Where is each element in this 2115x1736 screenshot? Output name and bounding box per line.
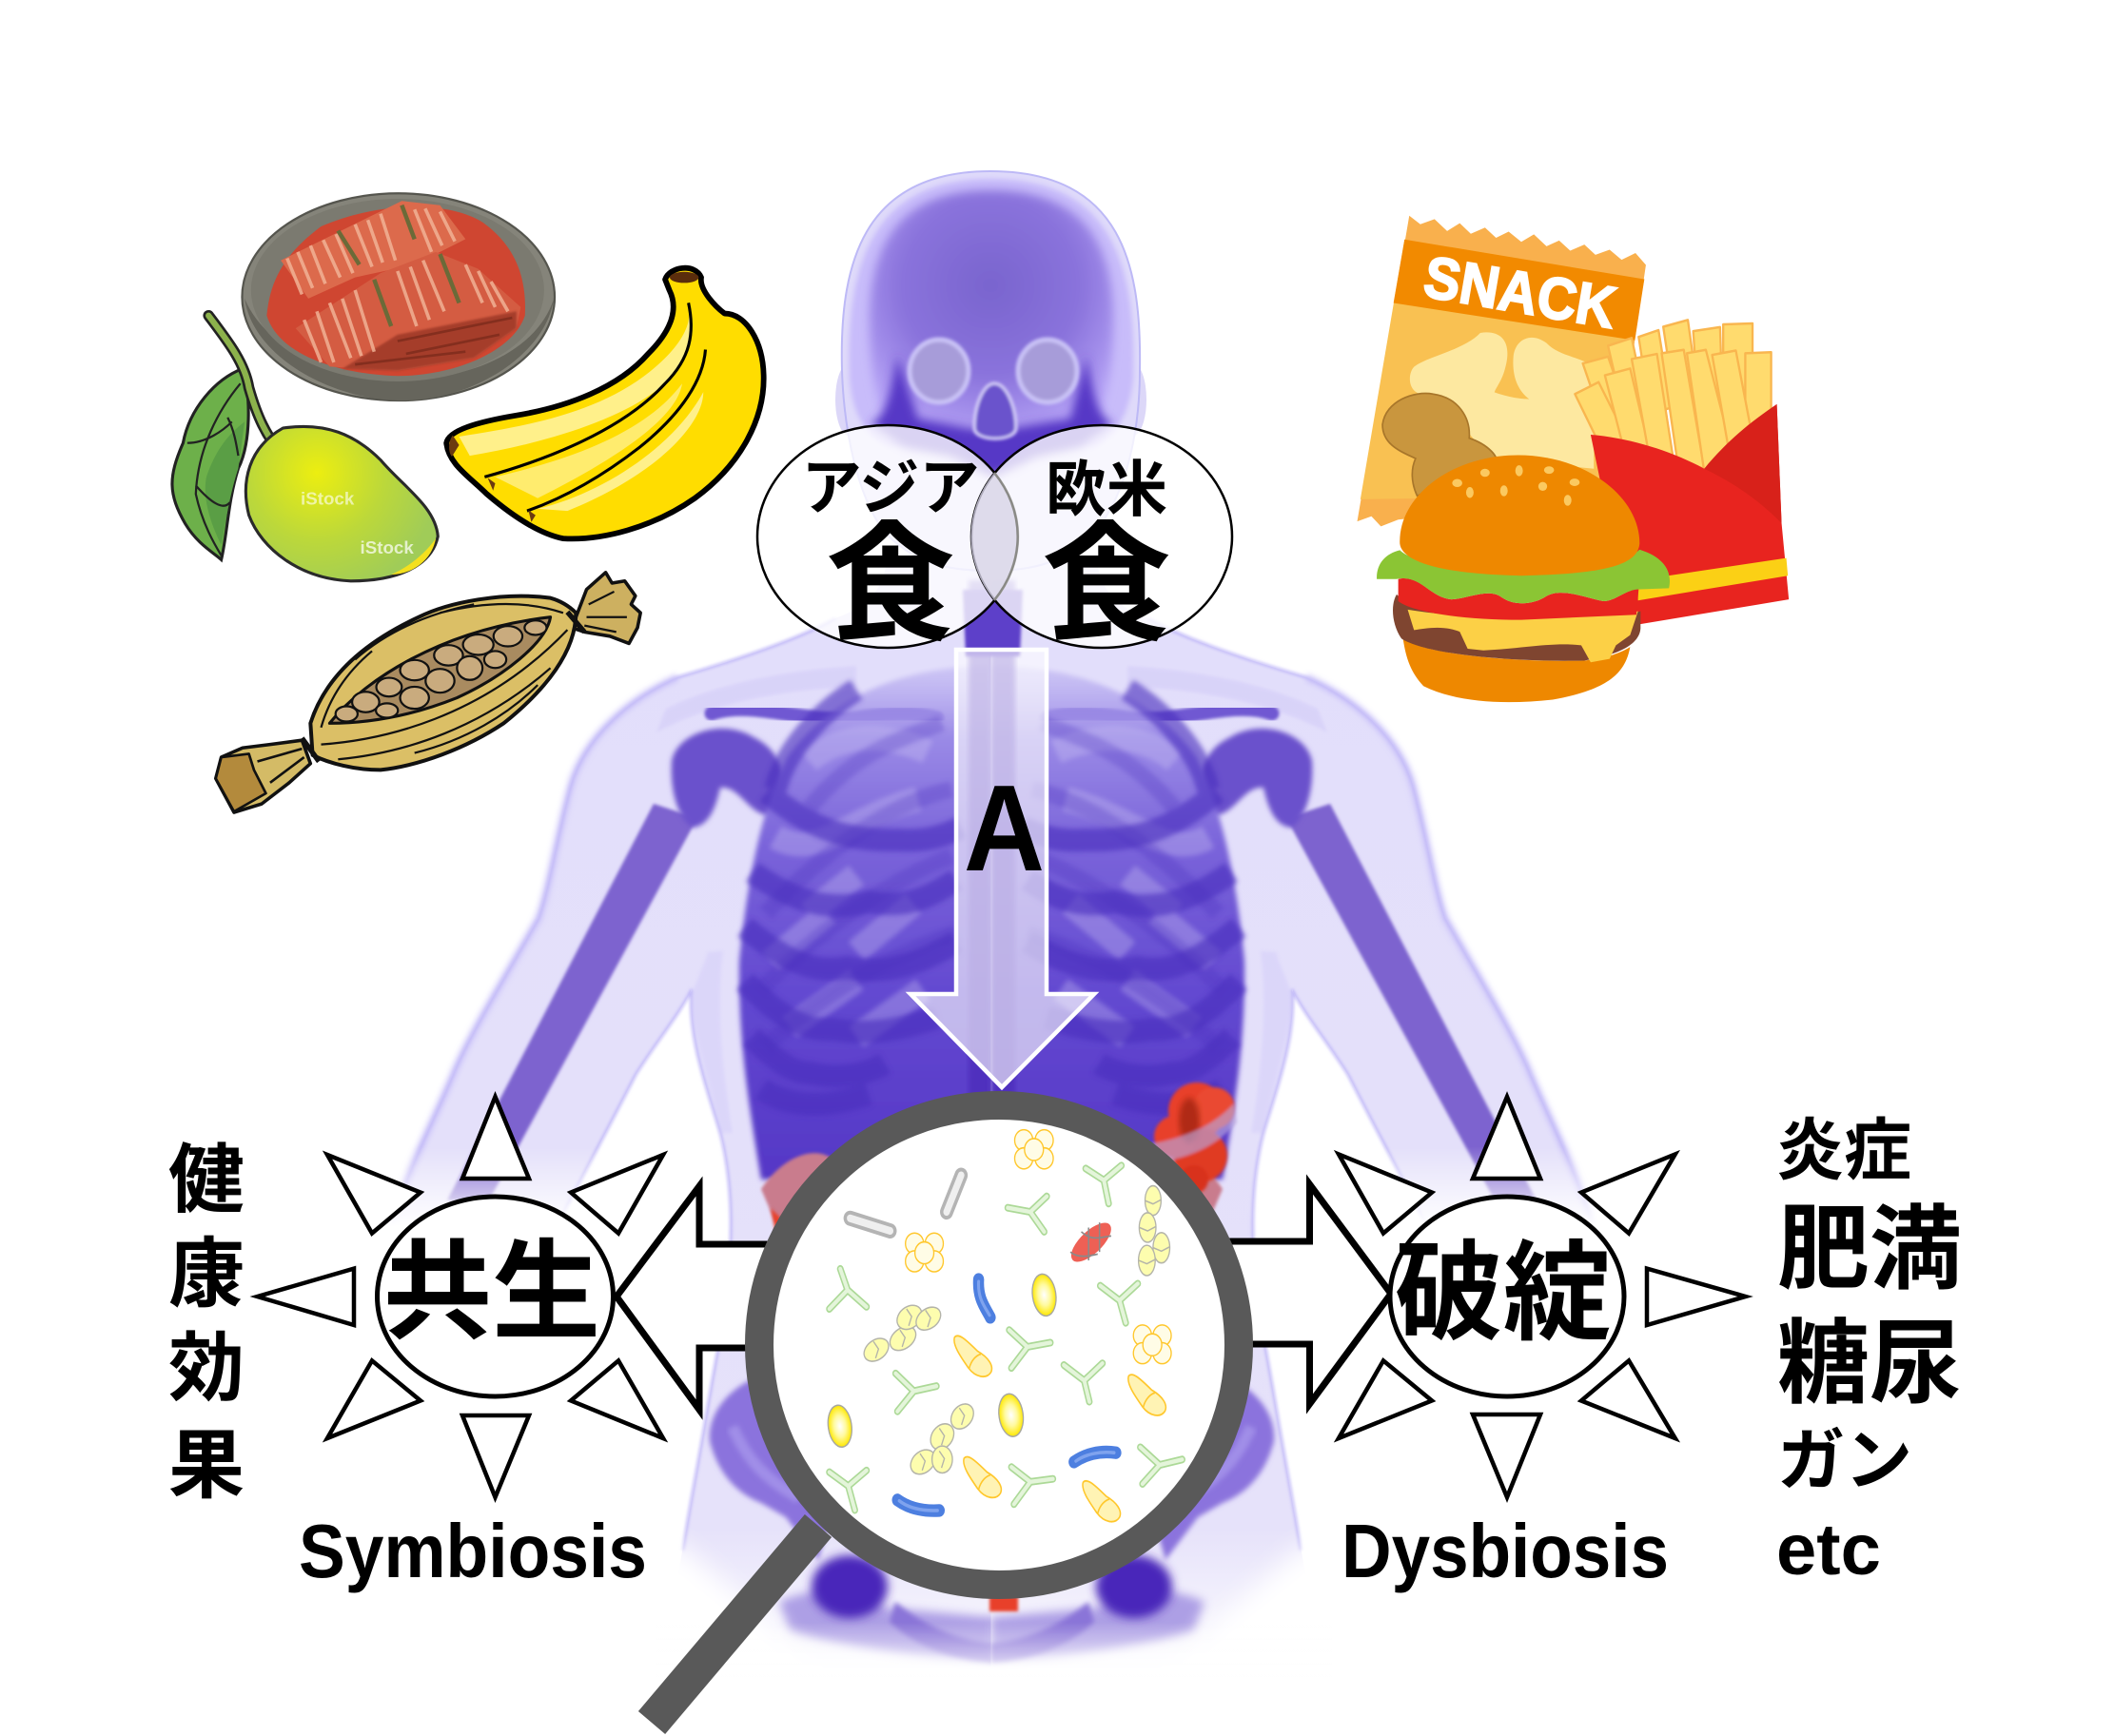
circle: Asian diet [757,425,1018,648]
Symbiosis sun [257,1097,663,1497]
head and skull [835,171,1146,656]
disease list: ガン [1777,1424,1912,1499]
food group: Western diet [1358,216,1789,702]
circle [1390,1197,1624,1396]
label 欧米: 欧米 [1046,456,1167,524]
kimchi bowl [242,193,555,400]
snack bag [1358,216,1646,526]
health benefits vertical text: 効 [168,1326,245,1411]
orange club bacteria [954,1336,1165,1522]
bacteria [825,1130,1183,1522]
rays [257,1097,663,1497]
french fries [1575,320,1772,472]
magnifying glass with gut bacteria [652,1105,1239,1723]
snack label text: SNACK [1420,244,1621,341]
circle: Western diet [970,425,1232,648]
Dysbiosis sun [1339,1097,1746,1497]
rays [1339,1097,1746,1497]
large character 食 right: 食 [1042,513,1171,657]
disease list: 糖尿 [1777,1312,1962,1415]
破綻: 破綻 [1395,1234,1612,1355]
mango: iStock [361,537,414,557]
leaf and stem [172,316,281,559]
lens [759,1105,1239,1585]
letter A: A [964,760,1045,897]
yellow oval bacteria [825,1272,1059,1450]
disease list: 肥満 [1777,1198,1962,1301]
Symbiosis label: Symbiosis [299,1509,647,1593]
banana [446,268,764,538]
yellow chain bacteria [861,1186,1170,1479]
mango [245,426,438,581]
mango: iStock [301,488,355,508]
disease list: 炎症 [1776,1114,1911,1189]
hamburger [1377,455,1670,702]
green Y-shaped bacteria [830,1165,1183,1510]
circle [377,1197,613,1396]
food group: Asian diet [172,193,764,812]
human body skeleton illustration [362,171,1639,1736]
large character 食 left: 食 [826,513,955,657]
disease list: etc [1776,1510,1881,1590]
red organs [771,1083,1237,1611]
disease list [1776,1114,1962,1590]
right arrow to Dysbiosis [1227,1184,1391,1404]
Dysbiosis label: Dysbiosis [1341,1509,1669,1593]
health benefits vertical text: 健 [168,1138,245,1222]
natto [216,573,640,812]
red flagellated bacterium [1066,1216,1116,1269]
torso and arms, left and right halves [390,561,1594,1703]
共生: 共生 [383,1233,600,1354]
handle [652,1526,818,1723]
health benefits vertical text: 果 [168,1423,245,1508]
fries box [1591,404,1789,624]
health benefits vertical text [168,1138,245,1508]
grey rods [851,1176,961,1231]
fade of arms and pelvis into white [362,1146,1639,1736]
left arrow to Symbiosis [617,1186,790,1410]
orange flower cocci [906,1130,1171,1364]
blue curved rods [897,1279,1116,1511]
label アジア: アジア [801,454,980,522]
health benefits vertical text: 康 [168,1232,245,1317]
downward arrow A [911,650,1094,1087]
